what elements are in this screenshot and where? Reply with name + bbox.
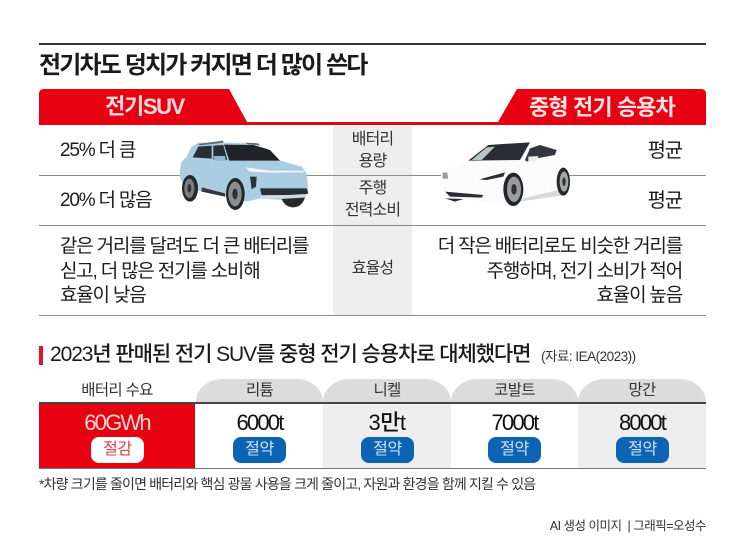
pill: manganese saved: [616, 437, 669, 463]
sedan efficiency description: 주행하며, 전기 소비가 적어: [487, 260, 682, 282]
sedan battery value: 평균: [648, 140, 682, 162]
pill: nickel saved: 절약: [373, 441, 402, 458]
column header: lithium: 리튬: [246, 382, 273, 399]
value: cobalt: 7000t: [491, 410, 538, 435]
label: battery capacity: [352, 130, 393, 170]
pill: cobalt saved: 절약: [500, 441, 529, 458]
SUV efficiency description: [60, 236, 308, 306]
value: lithium: 6000t: [236, 410, 283, 435]
sedan consumption value: 평균: [648, 190, 682, 212]
tab: lithium: [196, 379, 323, 402]
label: driving consumption: 전력소비: [345, 202, 400, 218]
pill: reduction: 절감: [103, 441, 132, 458]
SUV consumption value: 20% 더 많음: [60, 190, 151, 211]
table bottom rule: [39, 468, 706, 469]
tab: cobalt: [451, 379, 578, 402]
title: 전기차도 덩치가 커지면 더 많이 쓴다: [39, 52, 367, 79]
source note: (자료: IEA(2023)): [541, 349, 636, 364]
header: midsize electric sedan: 중형 전기 승용차: [529, 95, 675, 120]
comparison header band: [39, 89, 706, 125]
pill: reduction: [91, 437, 144, 463]
table column shading: manganese: [578, 403, 706, 468]
row divider 2: [39, 225, 706, 226]
column header: nickel: 니켈: [373, 382, 401, 399]
top rule: [39, 43, 706, 45]
pill: lithium saved: [233, 437, 286, 463]
value: manganese: 8000t: [619, 410, 665, 435]
header: electric SUV: 전기SUV: [105, 94, 184, 119]
footnote: *차량 크기를 줄이면 배터리와 핵심 광물 사용을 크게 줄이고, 자원과 환경을 함께 지킬 수 있음: [39, 476, 535, 492]
table top rule: [39, 402, 706, 404]
column header: battery demand: 배터리 수요: [81, 382, 153, 399]
table column shading: nickel: [323, 403, 451, 468]
label: battery capacity: 용량: [359, 152, 386, 170]
column header: cobalt: 코발트: [494, 382, 535, 399]
section heading: 2023년 판매된 전기 SUV를 중형 전기 승용차로 대체했다면: [50, 343, 530, 366]
value: 60GWh: 60GWh: [84, 410, 150, 435]
sedan efficiency description: 더 작은 배터리로도 비슷한 거리를: [438, 236, 682, 257]
label: driving consumption: 주행: [359, 180, 386, 197]
SUV battery value: 25% 더 큼: [60, 140, 135, 161]
row divider 1: [39, 175, 706, 176]
SUV efficiency description: 싣고, 더 많은 전기를 소비해: [60, 260, 259, 282]
row divider 3: [39, 315, 706, 316]
value: nickel: 3만t: [368, 410, 406, 435]
icon: white sedan: [441, 142, 570, 206]
tab: manganese: [578, 379, 706, 402]
label: driving consumption: [345, 180, 400, 218]
label: efficiency: 효율성: [352, 260, 393, 277]
column header: manganese: 망간: [628, 382, 656, 399]
section accent bar: [39, 346, 43, 365]
SUV efficiency description: 같은 거리를 달려도 더 큰 배터리를: [60, 236, 308, 257]
credit: AI 생성 이미지 | 그래픽=오성수: [550, 519, 706, 533]
pill: manganese saved: 절약: [628, 441, 657, 458]
tab: nickel: [323, 379, 451, 402]
sedan efficiency description: [438, 236, 682, 306]
center gray label column: [333, 126, 412, 315]
red cell: battery demand: [39, 403, 195, 468]
pill: nickel saved: [361, 437, 414, 463]
pill: cobalt saved: [488, 437, 541, 463]
pill: lithium saved: 절약: [245, 441, 274, 458]
icon: blue SUV: [180, 140, 308, 210]
label: battery capacity: 배터리: [352, 131, 393, 148]
SUV efficiency description: 효율이 낮음: [60, 285, 145, 306]
sedan efficiency description: 효율이 높음: [597, 285, 682, 306]
